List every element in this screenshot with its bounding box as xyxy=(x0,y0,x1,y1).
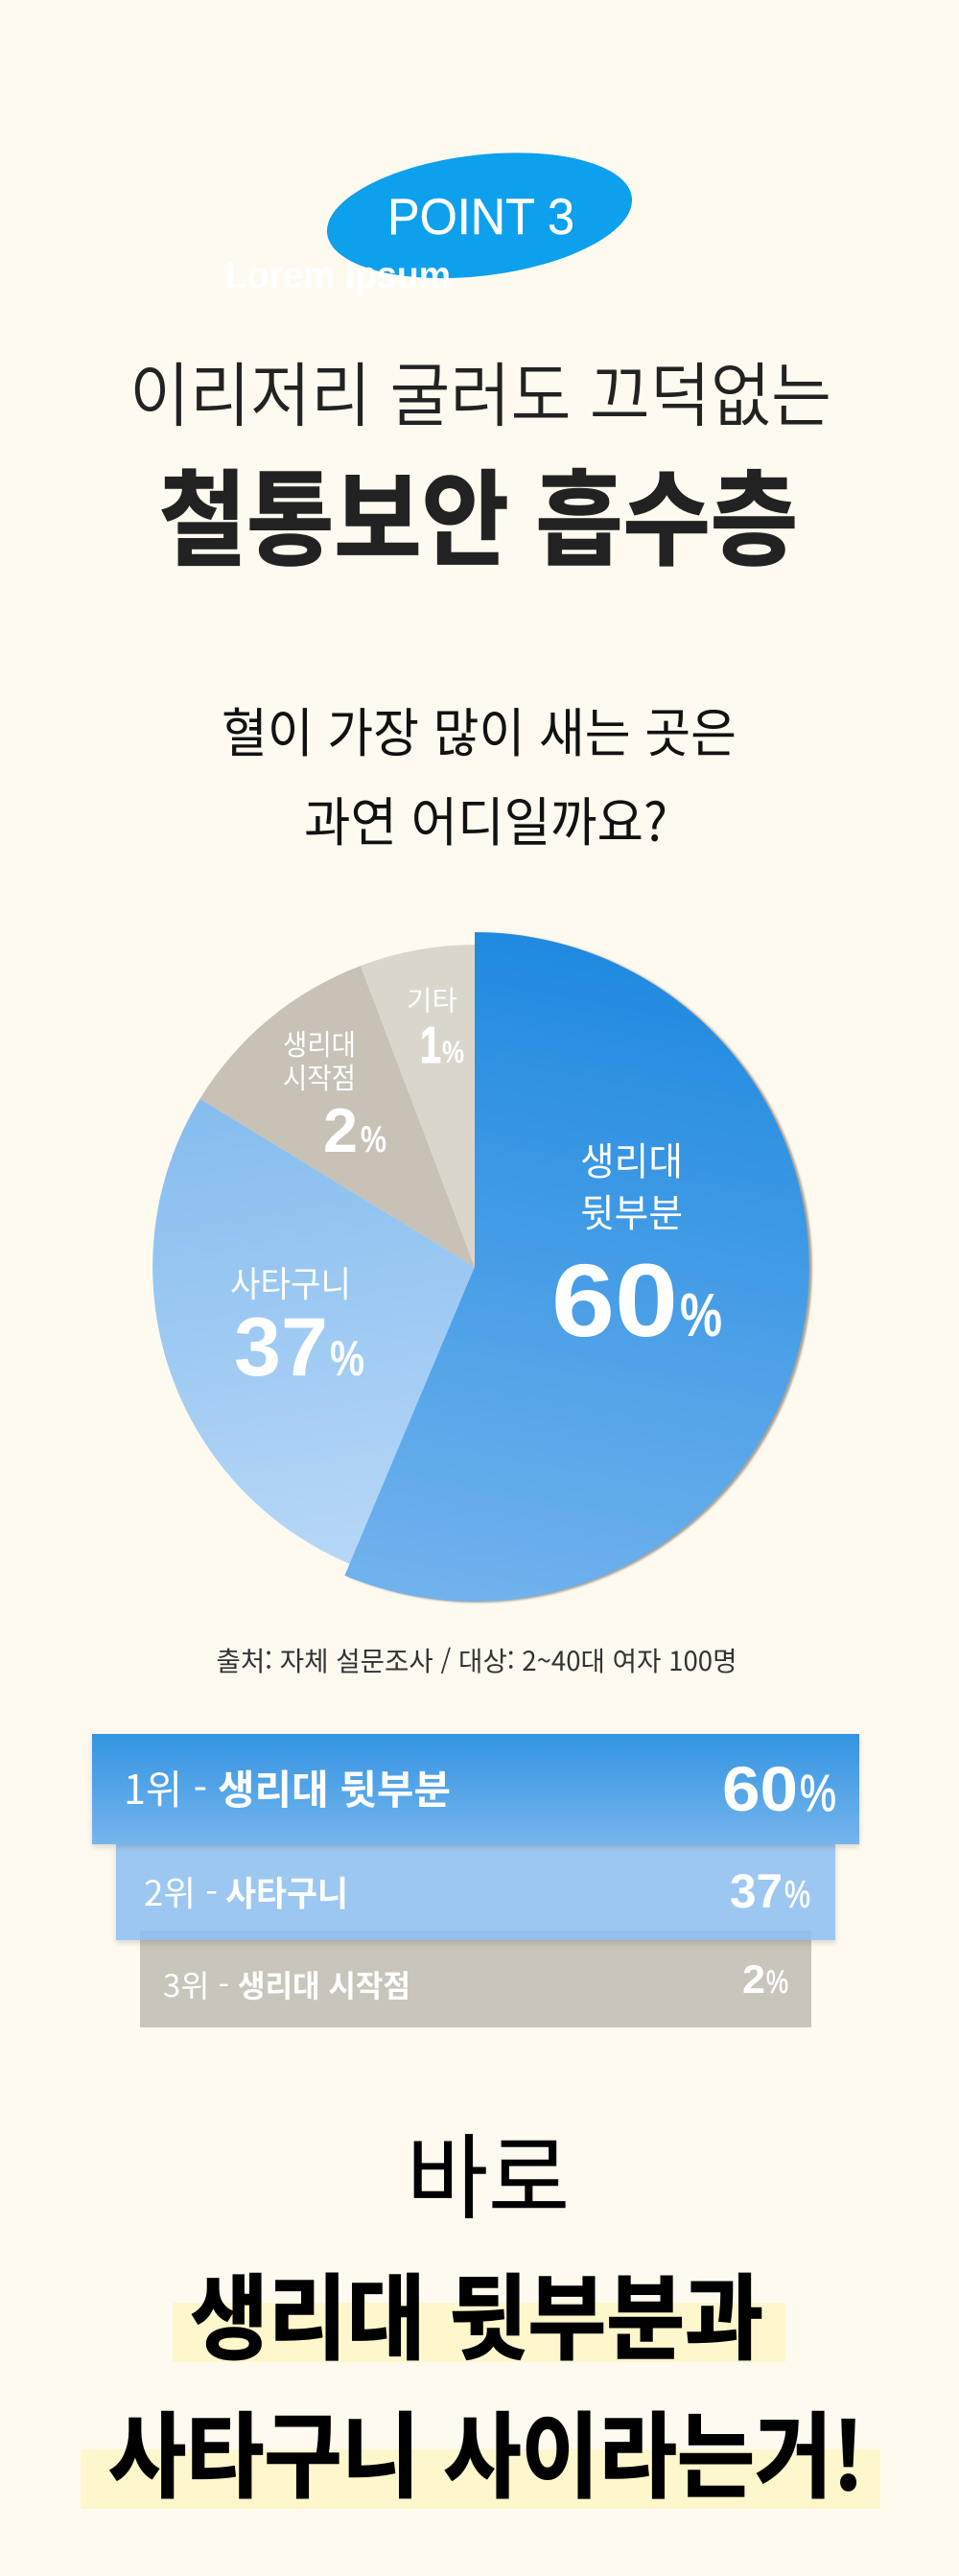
label: 생리대 뒷부분 60% xyxy=(551,1131,722,1358)
question text: 혈이 가장 많이 새는 곳은 xyxy=(222,691,737,767)
title: 이리저리 굴러도 끄덕없는 xyxy=(129,340,831,441)
rank 2 row: 37 xyxy=(730,1864,783,1918)
rank 1 row: 60 xyxy=(722,1753,798,1824)
label: 사타구니 37%: 37 xyxy=(234,1301,328,1393)
slice: 생리대 뒷부분 shadow xyxy=(347,933,812,1603)
source note: 출처: 자체 설문조사 / 대상: 2~40대 여자 100명 xyxy=(217,1641,737,1679)
text: 생리대 뒷부분과: 생리대 뒷부분과 xyxy=(190,2243,763,2378)
highlight: line 2 xyxy=(81,2449,880,2509)
rank 3 row: 2 xyxy=(742,1956,765,2002)
label: 기타 1%: 1 xyxy=(420,1017,441,1074)
rank 2 row: 2위 - xyxy=(144,1866,218,1916)
badge: POINT 3 xyxy=(320,137,639,293)
slice: 생리대 시작점 xyxy=(199,966,475,1267)
label: 기타 1% xyxy=(407,980,464,1074)
placeholder label: Lorem Ipsum: Lorem Ipsum xyxy=(225,255,451,296)
label: 기타 1%: % xyxy=(442,1035,464,1069)
highlight: line 1 xyxy=(173,2303,785,2362)
label: 기타 1%: 기타 xyxy=(407,980,457,1019)
label: 생리대 뒷부분 60%: % xyxy=(680,1280,722,1349)
rank 1 row xyxy=(92,1734,859,1844)
rank 1 row: % xyxy=(800,1765,836,1822)
label: 생리대 시작점 2%: 2 xyxy=(323,1095,358,1165)
pie chart xyxy=(152,932,812,1603)
rank 3 row: 생리대 시작점 xyxy=(238,1962,410,2006)
badge: POINT 3: POINT 3 xyxy=(387,189,574,246)
slice: 기타 xyxy=(361,945,475,1267)
rank 2 row: 사타구니 xyxy=(225,1866,348,1916)
label: 생리대 시작점 2%: 시작점 xyxy=(283,1055,356,1097)
text: 바로: 바로 xyxy=(407,2104,570,2237)
label: 생리대 시작점 2%: % xyxy=(361,1119,386,1160)
rank 3 row: 3위 - xyxy=(163,1962,229,2006)
label: 생리대 시작점 2%: 생리대 xyxy=(283,1021,356,1064)
rank 3 row: % xyxy=(766,1964,788,2001)
label: 사타구니 37% xyxy=(230,1255,364,1393)
text: 사타구니 사이라는거!: 사타구니 사이라는거! xyxy=(108,2381,864,2517)
title xyxy=(129,340,831,587)
question text: 과연 어디일까요? xyxy=(304,780,667,856)
ranking table xyxy=(92,1734,859,2027)
rank 2 row xyxy=(116,1844,835,1940)
title: 철통보안 흡수층 xyxy=(159,437,798,587)
label: 사타구니 37%: % xyxy=(330,1331,364,1387)
rank 1 row: 생리대 뒷부분 xyxy=(218,1758,451,1816)
slice: 사타구니 xyxy=(152,1099,475,1568)
label: 생리대 시작점 2% xyxy=(283,1021,386,1165)
label: 생리대 뒷부분 60%: 뒷부분 xyxy=(580,1183,683,1238)
label: 사타구니 37%: 사타구니 xyxy=(230,1255,351,1307)
label: 생리대 뒷부분 60%: 60 xyxy=(551,1242,678,1358)
rank 2 row: % xyxy=(784,1874,810,1916)
slice: 생리대 뒷부분 xyxy=(344,932,809,1602)
rank 1 row: 1위 - xyxy=(124,1758,207,1816)
question text xyxy=(222,691,737,856)
rank 3 row xyxy=(140,1931,811,2027)
conclusion heading xyxy=(81,2104,880,2517)
label: 생리대 뒷부분 60%: 생리대 xyxy=(580,1131,683,1186)
